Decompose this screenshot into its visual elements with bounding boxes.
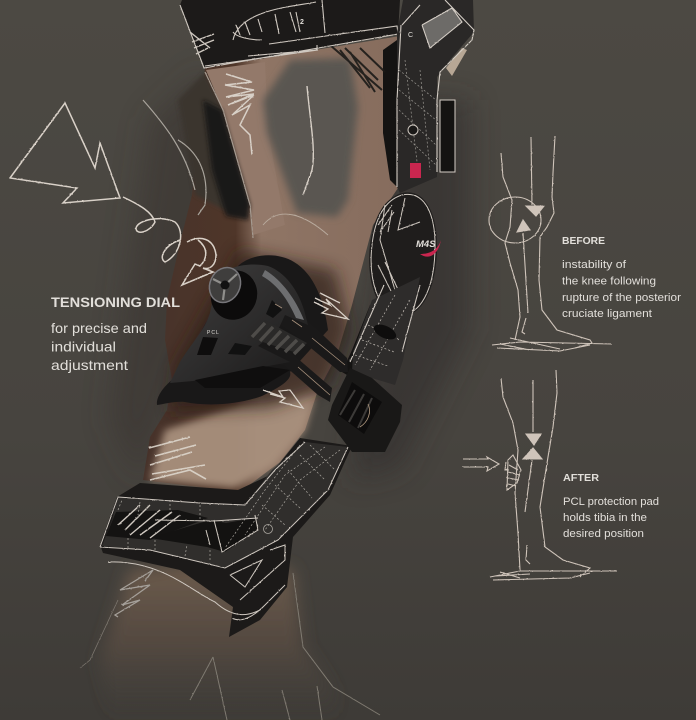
before line 2: the knee following — [562, 276, 656, 288]
dial description line 2: individual — [51, 338, 116, 354]
dark hatching along thigh — [203, 100, 250, 220]
hinge mark: C — [408, 32, 413, 39]
dial label: PCL — [207, 330, 220, 336]
shell gloss — [262, 270, 304, 320]
quilted strap — [102, 442, 348, 568]
dial heading: TENSIONING DIAL — [51, 294, 180, 310]
illustration: leg — [100, 36, 470, 720]
red brand label — [410, 163, 421, 178]
hatch top of thigh — [330, 45, 385, 92]
ribbed grille — [247, 320, 307, 353]
strap number: 2 — [300, 19, 304, 26]
arrow: to skin lower — [263, 390, 303, 408]
dial knob — [204, 264, 264, 326]
upper tail strap — [270, 300, 348, 372]
shade beside strut — [383, 40, 397, 187]
before leg diagram — [489, 136, 612, 351]
knee highlight — [150, 395, 315, 488]
hinge oval with logo — [369, 192, 441, 316]
dial centre — [220, 280, 230, 290]
strut logo badge — [372, 321, 398, 343]
lower tail strap — [255, 345, 332, 402]
tensioning dial — [157, 255, 348, 405]
before text — [562, 235, 681, 320]
after line 3: desired position — [563, 528, 644, 540]
plastic shell — [170, 264, 308, 383]
vents — [197, 337, 218, 355]
cuff outlines — [100, 442, 348, 620]
dial callout text — [51, 294, 180, 373]
upper thigh strap — [180, 0, 400, 68]
cuff opening — [106, 510, 208, 540]
arrow: to skin upper — [314, 293, 348, 319]
grille bars — [252, 323, 304, 354]
logo swoosh — [420, 240, 441, 257]
after line 1: PCL protection pad — [563, 496, 659, 508]
cuff stitching — [118, 445, 340, 560]
strut side shadow — [342, 305, 372, 378]
outline of back of thigh — [143, 100, 206, 215]
hinge upper strut — [397, 0, 474, 193]
large chalk arrow to dial — [10, 103, 216, 285]
side housing — [440, 100, 455, 172]
glossy lower panel — [195, 366, 290, 388]
felt pad — [157, 255, 328, 405]
after heading: AFTER — [563, 472, 599, 484]
after line 2: holds tibia in the — [563, 512, 647, 524]
before line 3: rupture of the posterior — [562, 292, 681, 304]
lower strut — [342, 277, 420, 385]
shaded window through thigh — [263, 58, 358, 217]
thigh and knee skin — [143, 36, 400, 492]
lower leg fading into background — [100, 560, 340, 720]
adjustment buckle — [328, 368, 402, 452]
logo text: M4S — [416, 239, 436, 250]
hinge rivet — [408, 125, 418, 135]
before line 4: cruciate ligament — [562, 308, 652, 320]
dial description line 1: for precise and — [51, 320, 147, 336]
pad shadow on skin — [170, 250, 350, 412]
dial description line 3: adjustment — [51, 357, 128, 373]
before line 1: instability of — [562, 259, 627, 271]
after leg diagram — [463, 370, 617, 580]
strap highlights — [275, 304, 345, 395]
before heading: BEFORE — [562, 235, 605, 247]
dial cap — [204, 262, 246, 308]
lower cuff — [100, 438, 352, 637]
dark area beside thigh — [178, 72, 250, 215]
skin chalk scribbles — [80, 72, 380, 720]
after text — [563, 472, 659, 540]
dial spokes — [213, 274, 237, 300]
thigh highlight strip — [206, 62, 285, 235]
